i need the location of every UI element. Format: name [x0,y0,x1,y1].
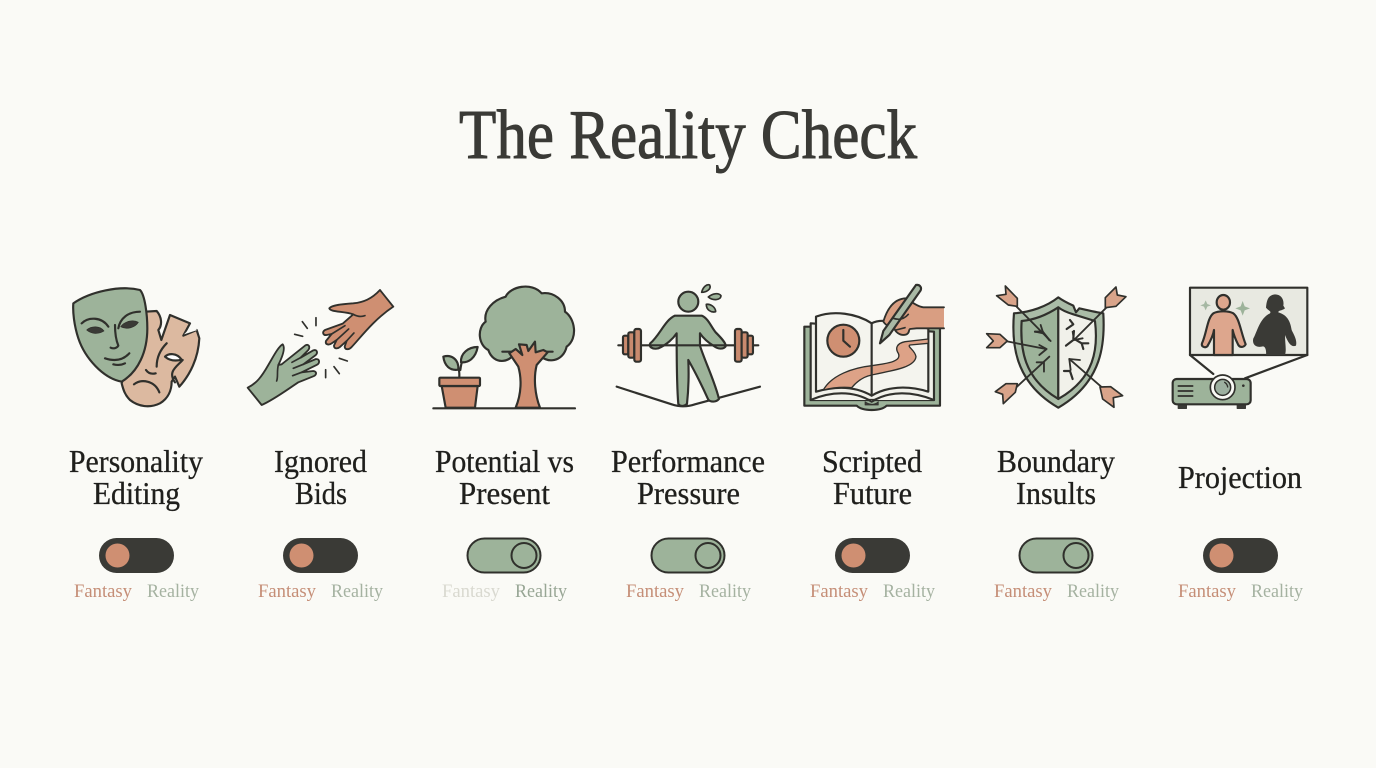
toggle: reality on: Fantasy [626,581,684,602]
toggle: fantasy on: Reality [147,581,199,602]
label: Scripted [822,444,922,479]
label: Bids [295,476,347,511]
toggle: fantasy on [258,538,383,602]
label [611,444,765,511]
label [822,444,922,511]
toggle: reality on [994,538,1119,602]
column: Potential vs Present [433,287,575,602]
column: Personality Editing [69,288,203,602]
icon: potted sprout and grown tree [433,287,575,408]
title: The Reality Check [459,97,917,174]
toggle: reality on: Reality [515,581,567,602]
label: Boundary [997,444,1115,479]
toggle: reality on: Fantasy [442,581,500,602]
label: Ignored [274,444,367,479]
toggle: reality on [626,538,751,602]
label: Insults [1016,476,1096,511]
toggle: fantasy on: Reality [883,581,935,602]
toggle: reality on: Reality [699,581,751,602]
icon: comedy and tragedy masks [73,288,199,406]
label [69,444,203,511]
label: Performance [611,444,765,479]
label: Present [459,476,550,511]
toggle: fantasy on: Fantasy [258,581,316,602]
label: Future [833,476,912,511]
column: Performance Pressure [611,285,765,602]
column: Boundary Insults [987,286,1126,602]
label [274,444,367,511]
label: Projection [1178,460,1302,495]
icon: figure lifting barbell on tightrope [617,285,760,406]
toggle: reality on [442,538,567,602]
toggle: reality on: Fantasy [994,581,1052,602]
toggle: fantasy on [1178,538,1303,602]
icon: projector casting figures on screen [1173,288,1307,409]
toggle: reality on: Reality [1067,581,1119,602]
toggle: fantasy on: Fantasy [810,581,868,602]
label: Personality [69,444,203,479]
column: Ignored Bids [248,290,393,602]
column: Scripted Future [804,285,944,602]
icon: reaching hands [248,290,393,405]
column: Projection [1173,288,1307,602]
toggle: fantasy on: Reality [1251,581,1303,602]
label [997,444,1115,511]
toggle: fantasy on: Fantasy [74,581,132,602]
toggle: fantasy on [74,538,199,602]
icon: open book with clock, road and writing hand [804,285,944,410]
toggle: fantasy on: Reality [331,581,383,602]
toggle: fantasy on: Fantasy [1178,581,1236,602]
label: Potential vs [435,444,574,479]
label: Editing [93,476,180,511]
label: Pressure [637,476,740,511]
toggle: fantasy on [810,538,935,602]
icon: cracked shield struck by arrows [987,286,1126,408]
label [435,444,574,511]
